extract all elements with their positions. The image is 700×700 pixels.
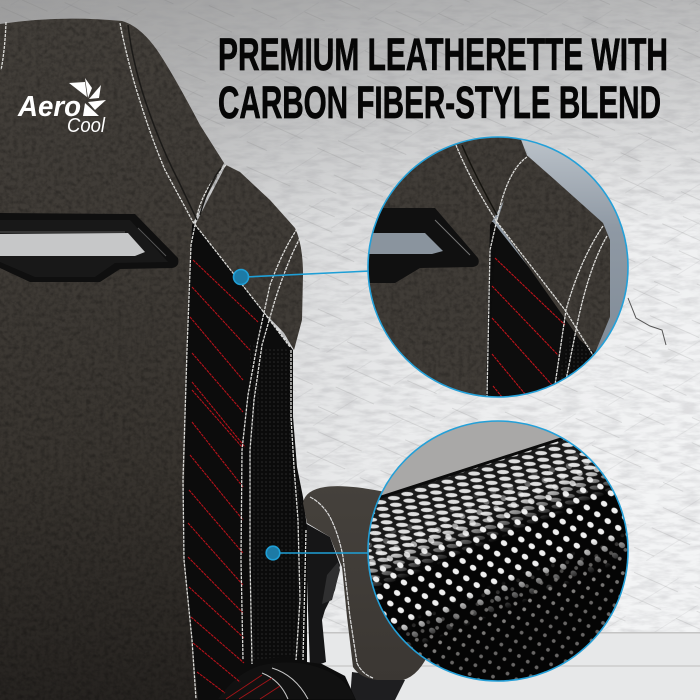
chair: perforated side panel [250,345,305,660]
chair: dark seam [128,25,221,220]
chair: seat bolster [218,662,355,699]
chair: handle inner rim [0,228,166,256]
detail: suede [368,137,528,397]
carbon: dim dots [397,534,628,679]
chair: black lower back and base [180,222,356,700]
title [218,29,668,128]
callout dot: carbon fiber [266,546,280,560]
chair [0,19,430,700]
chair: handle inner carbon [0,220,168,277]
magnifier: leatherette detail [368,137,628,397]
chair: armrest support [305,523,340,668]
detail: handle opening [368,233,443,254]
detail: ring [368,137,628,397]
carbon: woven area [368,440,628,680]
carbon: black base [370,470,628,680]
chair: armrest [303,486,430,680]
chair: white stitching [1,22,306,699]
carbon: grey top band [382,422,560,496]
detail: handle rim [435,220,470,255]
detail: white stitching [456,145,607,397]
callout dot: leatherette [234,270,248,284]
detail: suede texture [368,137,610,397]
detail: black panel [480,222,597,397]
chair: handle opening [0,233,145,256]
chair: bolster red stitching [226,675,280,699]
callout line: leatherette [245,271,370,277]
chair: armrest stitching [310,497,373,678]
chair: arm lever [322,562,340,604]
chair: bolster seams [262,668,308,699]
chair: suede texture [0,19,303,700]
detail: dark seam [462,145,497,215]
carbon: dark fold line [378,436,570,498]
chair: suede side wing [195,165,303,350]
logo: Aerocool [17,78,106,137]
chair: handle frame [0,213,178,282]
detail: perforated panel [558,338,590,379]
detail: handle frame [368,208,479,283]
magnifier: carbon fiber detail [360,420,640,690]
chair: suede backrest [0,19,224,700]
carbon: ring [368,421,628,681]
chair: foot stem [350,672,405,700]
detail: wall behind [492,140,628,352]
detail: suede wing [497,150,610,353]
carbon: streak rows [368,440,612,590]
logo: Aero wordmark: Aero [17,91,81,123]
carbon: bright dots [368,452,626,646]
chair: red stitching [188,260,258,693]
logo: pinwheel icon [69,78,106,116]
callout line: carbon fiber [277,552,370,554]
logo: Cool wordmark: Cool [67,115,106,137]
detail: red stitching [492,258,565,397]
